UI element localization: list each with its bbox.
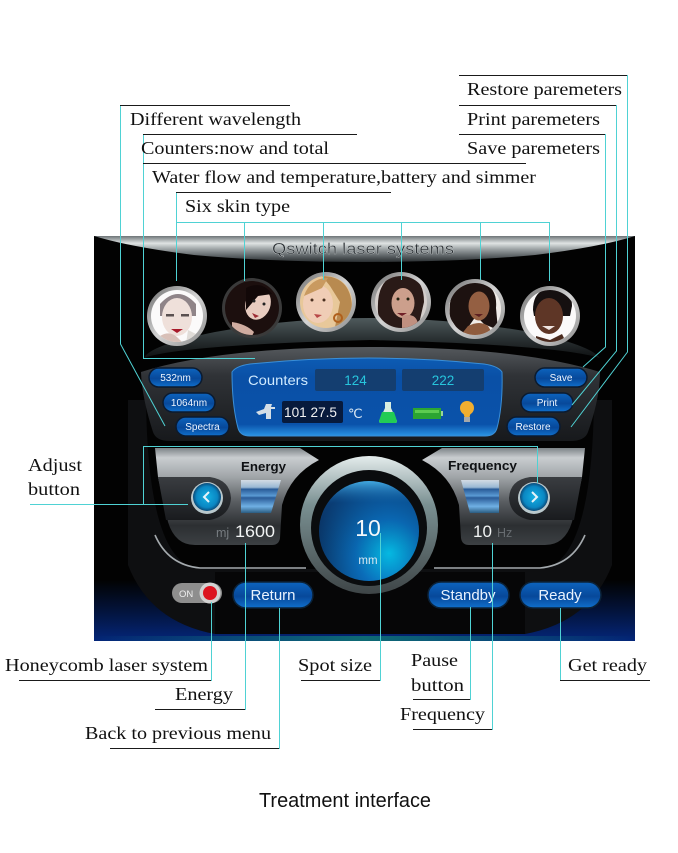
label: six skin type: Six skin type [185, 196, 290, 216]
wavelength buttons: 1064nm [171, 398, 207, 409]
frequency level bars [461, 480, 499, 513]
skin type portraits [147, 272, 580, 346]
energy panel [155, 448, 319, 545]
energy value [216, 522, 275, 541]
label: save parameters: Save paremeters [467, 138, 600, 158]
standby button: Standby [440, 587, 496, 604]
counter total: 222 [432, 373, 454, 388]
parameter buttons: Print [537, 398, 558, 409]
frequency value [473, 522, 512, 541]
label: different wavelength: Different wavelength [130, 109, 301, 129]
label: counters: Counters:now and total [141, 138, 329, 158]
label: restore parameters: Restore paremeters [467, 79, 622, 99]
label: pause button: button [411, 675, 464, 695]
icon: bulb [460, 401, 474, 422]
portrait 2 [222, 278, 282, 340]
spot value: 10 [355, 515, 381, 541]
parameter buttons: Save [550, 373, 573, 384]
label: energy: Energy [175, 684, 233, 704]
on switch [172, 582, 222, 604]
label: back to previous menu: Back to previous menu [85, 723, 271, 743]
on switch: ON [179, 589, 193, 600]
temperature readout [282, 401, 343, 423]
callout lines: black underlines [19, 76, 650, 748]
label: water flow: Water flow and temperature,battery and simmer [152, 167, 536, 187]
panel title: Qswitch laser systems [272, 241, 454, 258]
frequency value: 10 [473, 522, 492, 541]
bezel lines [155, 535, 585, 568]
return button: Return [250, 587, 296, 604]
label: adjust button: Adjust [28, 455, 82, 475]
counters label: Counters [248, 372, 308, 388]
ready button: Ready [538, 587, 582, 604]
label: pause: Pause [411, 650, 458, 670]
frequency title: Frequency [448, 459, 517, 473]
device panel [94, 236, 635, 641]
label: honeycomb laser system: Honeycomb laser system [5, 655, 208, 675]
label: get ready: Get ready [568, 655, 647, 675]
lower housing [128, 400, 612, 634]
top dome [94, 236, 635, 262]
screen [232, 358, 502, 436]
spot size dial [300, 456, 438, 594]
counter now: 124 [344, 373, 367, 388]
left arrow button [191, 482, 223, 514]
arc behind portraits [144, 318, 600, 358]
frequency panel [422, 448, 585, 545]
label: frequency: Frequency [400, 704, 485, 724]
parameter buttons [507, 368, 587, 436]
ready button [520, 582, 601, 608]
icon: battery [413, 408, 443, 419]
frequency value: Hz [497, 526, 512, 540]
portrait 4 [371, 272, 431, 332]
portrait 5 [445, 279, 505, 339]
return button [233, 582, 313, 608]
unit: ℃ [348, 406, 363, 421]
wavelength buttons [149, 368, 229, 436]
adjust dock [509, 477, 582, 520]
icon: water tap [256, 404, 275, 419]
energy level bars [241, 480, 281, 513]
energy title: Energy [241, 460, 286, 474]
energy value: mj [216, 526, 229, 540]
parameter buttons: Restore [515, 422, 551, 433]
standby button [428, 582, 509, 608]
label: adjust button line two: button [28, 479, 80, 499]
label: print parameters: Print paremeters [467, 109, 600, 129]
control body [141, 347, 600, 441]
portrait 6 [520, 286, 580, 346]
portrait 1 [147, 286, 207, 346]
caption: Treatment interface [259, 790, 431, 812]
energy value: 1600 [235, 522, 275, 541]
callout lines: teal leaders [30, 75, 628, 749]
icon: flask [379, 402, 397, 423]
label: spot size: Spot size [298, 655, 372, 675]
counter total [402, 369, 484, 391]
right arrow button [518, 482, 550, 514]
wavelength buttons: 532nm [160, 373, 191, 384]
wavelength buttons: Spectra [185, 422, 220, 433]
counter now [315, 369, 396, 391]
portrait 3 [296, 272, 356, 332]
temperature readout: 101 27.5 [284, 404, 337, 420]
adjust dock [158, 477, 231, 520]
spot unit: mm [358, 555, 378, 567]
